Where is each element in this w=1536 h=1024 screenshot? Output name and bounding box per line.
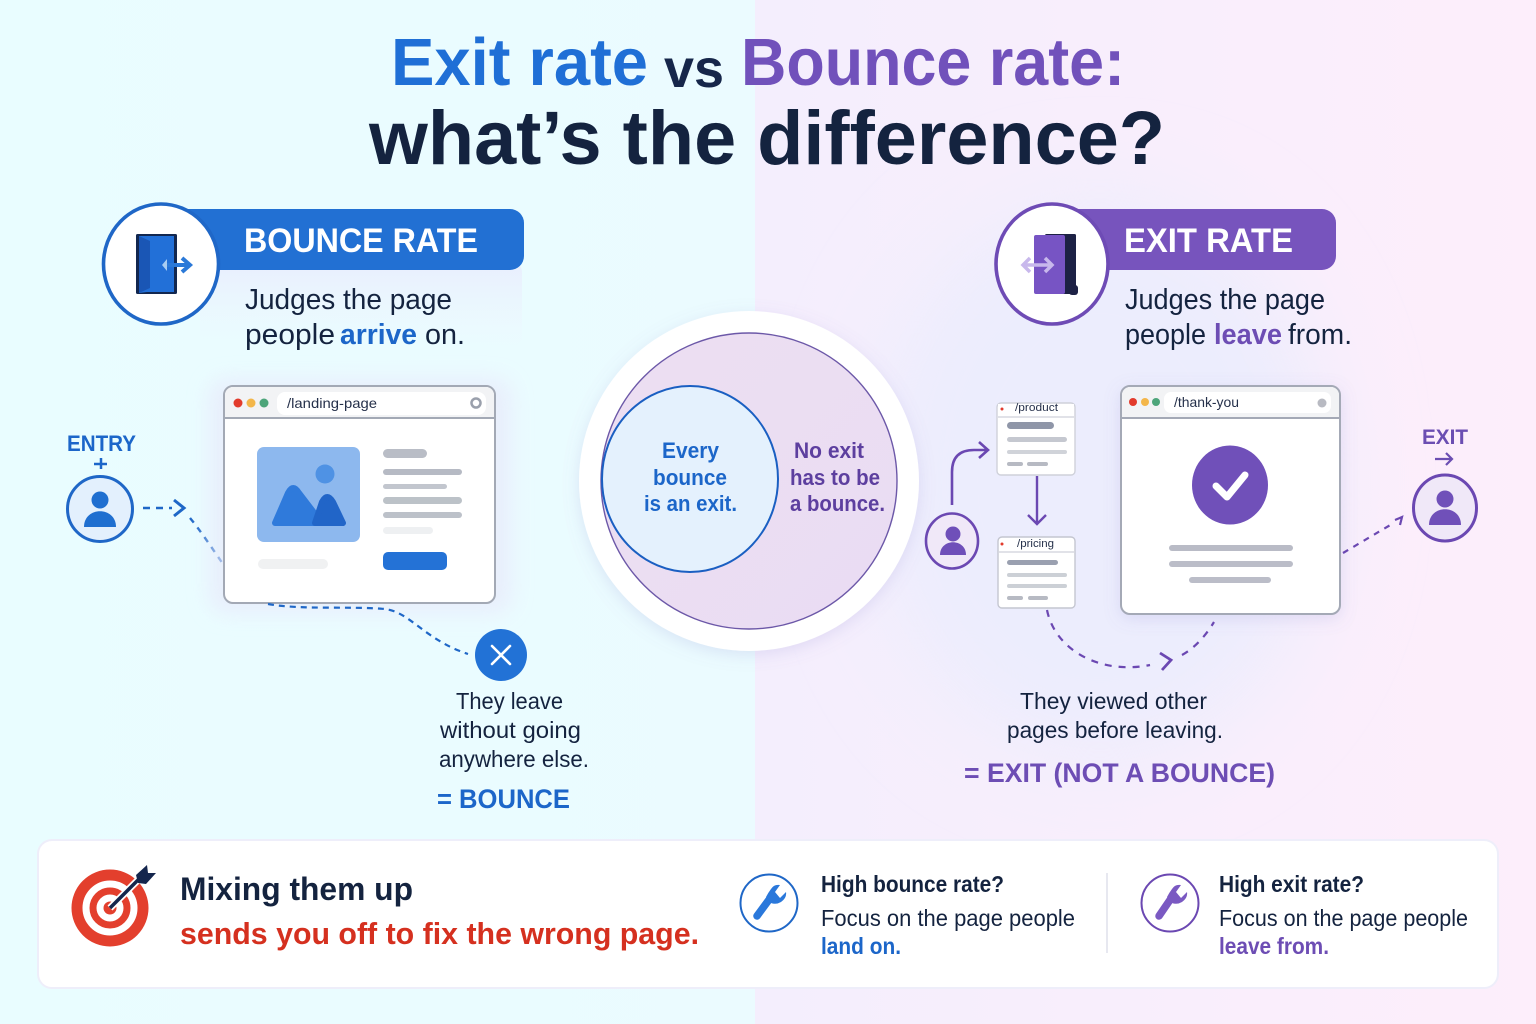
title: vs <box>664 39 724 99</box>
text: wrong page: sends you off to fix the wrong page. <box>180 916 699 951</box>
icon: bounce door <box>104 204 218 324</box>
circle: exits <box>601 333 897 629</box>
background: left half <box>0 0 755 1024</box>
text: no exit: has to be <box>790 465 880 490</box>
button <box>383 552 447 570</box>
text: equals exit: = EXIT (NOT A BOUNCE) <box>964 758 1275 788</box>
text: every bounce <box>644 438 737 516</box>
text: they leave: without going <box>439 717 581 743</box>
text: high bounce rate: land on. <box>821 933 901 959</box>
text: every bounce: bounce <box>653 465 727 490</box>
icon: exit path user <box>926 514 978 568</box>
text: they leave <box>439 688 589 772</box>
text: mixing them up: Mixing them up <box>180 871 413 907</box>
text: high bounce rate <box>821 871 1075 959</box>
image placeholder <box>257 447 360 542</box>
text: no exit: a bounce. <box>790 491 885 516</box>
label: entry <box>67 431 136 469</box>
icon: target <box>77 865 156 941</box>
heading: bounce rate: BOUNCE RATE <box>244 222 478 260</box>
browser: pricing <box>998 537 1075 608</box>
title <box>368 25 1165 181</box>
arrow: entry to landing page <box>143 500 223 564</box>
title: what’s the difference? <box>368 96 1165 181</box>
icon: blue wrench <box>740 874 798 932</box>
browser: landing page <box>208 378 512 614</box>
panel: bounce rate header <box>160 209 524 346</box>
text: they viewed <box>1007 688 1223 743</box>
text: exit definition <box>1125 284 1352 351</box>
icon: entry user <box>68 476 132 542</box>
text: high exit rate <box>1219 871 1468 959</box>
panel: bottom takeaway <box>38 840 1498 988</box>
label: entry: ENTRY <box>67 431 136 456</box>
text: no exit: No exit <box>794 438 865 463</box>
text: high exit rate: High exit rate? <box>1219 871 1364 897</box>
heading: exit rate: EXIT RATE <box>1124 222 1293 260</box>
panel: exit rate header <box>1060 209 1336 270</box>
text: high exit rate: leave from. <box>1219 933 1329 959</box>
text: exit definition: people <box>1125 319 1206 351</box>
browser: product <box>997 402 1075 475</box>
icon: bounce x <box>475 629 527 681</box>
text: exit definition: leave <box>1214 319 1282 351</box>
text: url product: /product <box>1015 402 1058 414</box>
title: Bounce rate: <box>741 25 1125 100</box>
text: they viewed: They viewed other <box>1020 688 1207 714</box>
text: they viewed: pages before leaving. <box>1007 717 1223 743</box>
text: no exit <box>790 438 885 516</box>
text: url thank-you: /thank-you <box>1174 394 1239 410</box>
text: url landing page: /landing-page <box>287 395 377 411</box>
label: exit: EXIT <box>1422 426 1468 449</box>
title: Exit rate <box>391 25 648 100</box>
text: high bounce rate: High bounce rate? <box>821 871 1004 897</box>
icon: purple wrench <box>1142 874 1198 932</box>
background: right half <box>755 0 1536 1024</box>
label: exit <box>1422 426 1468 465</box>
text: bounce definition: arrive <box>340 319 417 351</box>
icon: check <box>1192 446 1268 524</box>
text: every bounce: is an exit. <box>644 491 737 516</box>
arrow: user to product <box>952 442 988 505</box>
text: exit definition: Judges the page <box>1125 284 1325 316</box>
arrow: pricing to thank-you <box>1047 610 1214 670</box>
icon: exit user <box>1414 475 1476 541</box>
arrow: thank-you to exit <box>1343 517 1402 553</box>
text: every bounce: Every <box>662 438 720 463</box>
icon: exit door <box>996 204 1108 324</box>
text: they leave: anywhere else. <box>439 746 589 772</box>
text: bounce definition: people <box>245 319 335 351</box>
arrow: product to pricing <box>1028 476 1046 524</box>
text: they leave: They leave <box>456 688 563 714</box>
text: exit definition: from. <box>1288 319 1352 351</box>
text: bounce definition: on. <box>425 319 465 351</box>
text: bounce definition: Judges the page <box>245 284 452 316</box>
text: bounce definition <box>245 284 465 351</box>
text: url pricing: /pricing <box>1017 538 1054 550</box>
text: high bounce rate: Focus on the page people <box>821 905 1075 931</box>
circle: bounces <box>602 386 778 572</box>
venn diagram <box>579 311 919 651</box>
browser: thank-you <box>1121 386 1340 614</box>
text: high exit rate: Focus on the page people <box>1219 905 1468 931</box>
text: equals bounce: = BOUNCE <box>437 784 570 814</box>
arrow: landing page to bounce <box>268 604 468 654</box>
